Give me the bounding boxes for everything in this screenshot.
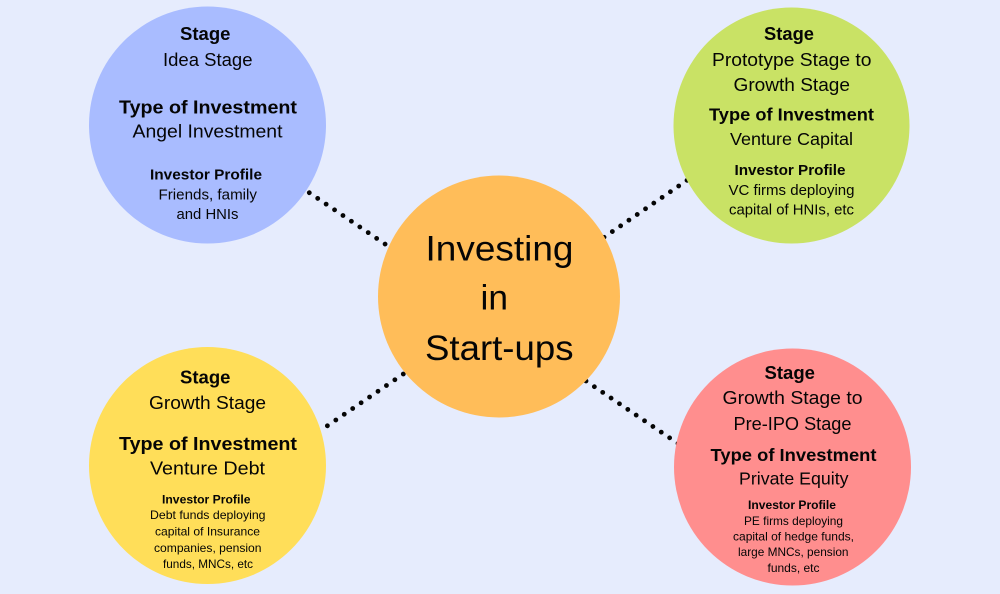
panel: venture capital: Growth Stage [734, 74, 850, 95]
central circle: investing in start-ups [378, 176, 620, 418]
panel: angel investment: Friends, family [158, 187, 258, 203]
panel: venture debt [89, 347, 326, 584]
panel: private equity: capital of hedge funds, [733, 530, 854, 544]
panel: venture capital: Venture Capital [730, 129, 853, 149]
panel: venture debt: Growth Stage [149, 392, 266, 413]
panel: angel investment: Idea Stage [163, 49, 252, 70]
panel: private equity: Pre-IPO Stage [734, 413, 852, 434]
panel: venture capital: VC firms deploying [728, 183, 854, 199]
panel: venture debt: Type of Investment [119, 433, 297, 454]
dotted connector: top right [600, 180, 687, 240]
panel: private equity [674, 348, 911, 586]
panel: venture capital: Investor Profile [734, 163, 846, 179]
panel: angel investment: Angel Investment [132, 121, 282, 142]
central circle: investing in start-ups: Start-ups [425, 328, 574, 368]
central circle: investing in start-ups: Investing [426, 229, 574, 269]
panel: angel investment [89, 6, 326, 244]
panel: venture capital: Stage [764, 23, 814, 44]
panel: private equity: Type of Investment [710, 445, 877, 465]
panel: angel investment: Investor Profile [150, 167, 262, 183]
dotted connector: bottom right [586, 381, 678, 444]
panel: venture capital [674, 8, 910, 244]
panel: venture debt: Stage [180, 366, 230, 387]
panel: angel investment: and HNIs [176, 207, 238, 223]
panel: private equity: PE firms deploying [744, 514, 843, 528]
panel: angel investment: Type of Investment [119, 96, 297, 117]
panel: angel investment: Stage [180, 23, 230, 44]
panel: venture debt: capital of Insurance [155, 524, 260, 538]
panel: venture capital: Type of Investment [709, 105, 874, 125]
dotted connector: bottom left [319, 374, 403, 432]
panel: private equity: Private Equity [739, 468, 849, 488]
panel: venture debt: funds, MNCs, etc [163, 557, 253, 571]
panel: private equity: funds, etc [768, 561, 820, 575]
panel: private equity: large MNCs, pension [738, 545, 848, 559]
dotted connector: top left [309, 193, 395, 251]
panel: private equity: Growth Stage to [722, 387, 862, 408]
panel: venture capital: capital of HNIs, etc [729, 202, 854, 218]
panel: venture debt: companies, pension [154, 541, 262, 555]
panel: venture debt: Venture Debt [150, 457, 265, 478]
panel: venture debt: Debt funds deploying [150, 508, 266, 522]
panel: venture debt: Investor Profile [162, 492, 251, 506]
central circle: investing in start-ups: in [480, 277, 508, 317]
panel: private equity: Stage [764, 362, 815, 383]
panel: venture capital: Prototype Stage to [712, 49, 872, 70]
panel: private equity: Investor Profile [748, 498, 836, 512]
